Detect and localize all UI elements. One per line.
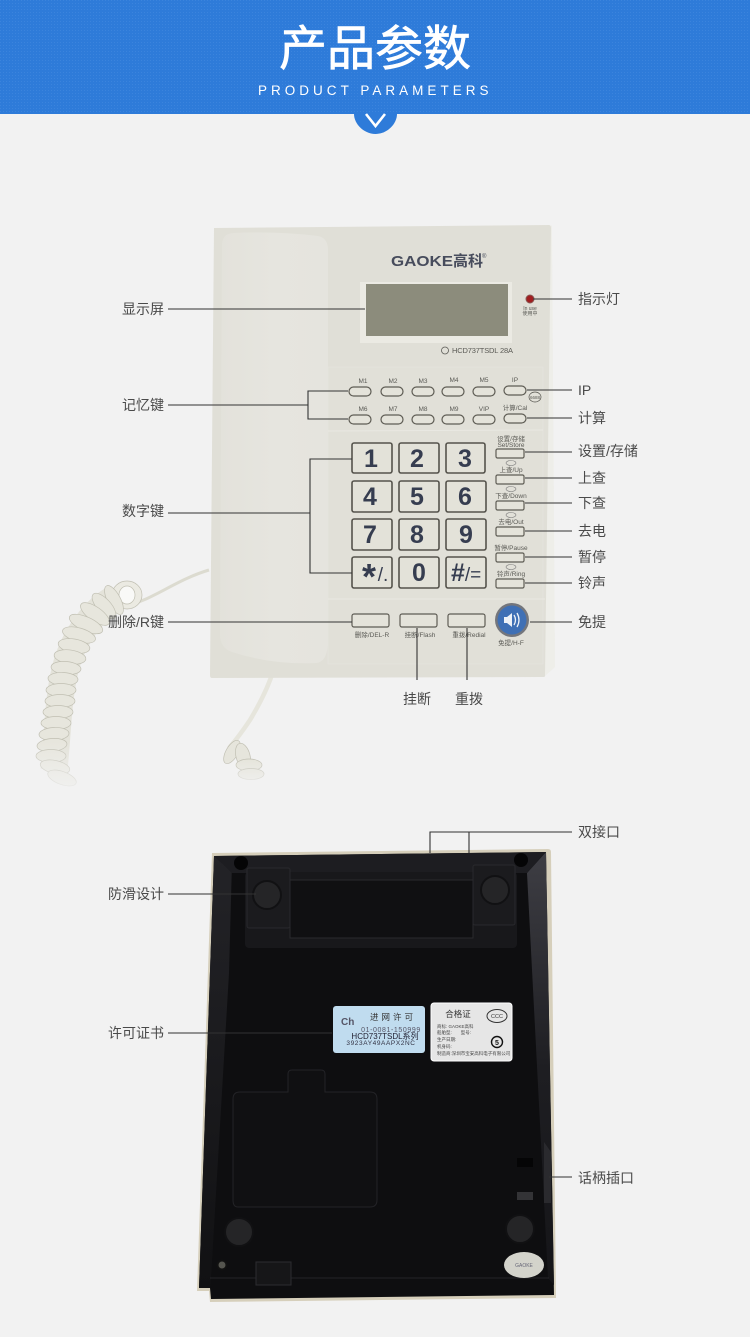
certificate sticker: 机身码:	[437, 1043, 452, 1050]
number keypad: 4	[363, 483, 377, 511]
labels: right	[578, 291, 638, 1186]
seal sticker: GAOKE	[515, 1263, 534, 1269]
labels: right: 双接口	[578, 824, 620, 840]
function keys: Set/Store	[497, 442, 525, 449]
labels: right: 暂停	[578, 549, 606, 565]
labels: bottom: 挂断	[403, 691, 431, 707]
memory keys: M4	[449, 377, 459, 384]
memory keys: M9	[449, 406, 459, 413]
function keys: 下查/Down	[495, 491, 527, 500]
network license sticker: Ch	[341, 1017, 354, 1028]
labels: right: 下查	[578, 495, 606, 511]
brand logo: 高科	[453, 252, 483, 270]
labels: left: 数字键	[122, 503, 164, 519]
labels: right: 免提	[578, 614, 606, 630]
speaker button: 免提/H-F	[498, 638, 524, 647]
bottom keys: 挂断/Flash	[405, 630, 436, 639]
right bevel	[527, 852, 554, 1285]
labels: left: 显示屏	[122, 301, 164, 317]
memory keys: M1	[358, 378, 368, 385]
number keypad	[352, 443, 486, 597]
keypad panel	[328, 367, 543, 664]
number keypad: /.	[378, 565, 388, 586]
certificate sticker: 商标: GAOKE高科	[437, 1023, 474, 1030]
top band	[214, 852, 546, 873]
number keypad: 3	[458, 445, 472, 473]
labels: right: 话柄插口	[578, 1170, 634, 1186]
labels: right: 设置/存储	[578, 443, 638, 459]
labels: left: 许可证书	[108, 1025, 164, 1041]
display screen	[360, 282, 512, 343]
indicator light: In use	[523, 306, 537, 312]
model number: HCD737TSDL 28A	[452, 346, 513, 355]
handset jack	[517, 1142, 551, 1203]
brand logo	[391, 252, 487, 270]
memory keys: VIP	[479, 406, 489, 413]
screw	[218, 1260, 226, 1270]
number keypad: #	[451, 559, 465, 587]
brand logo: ®	[482, 253, 487, 260]
number keypad: 6	[458, 483, 472, 511]
leader lines	[168, 299, 572, 1177]
certificate sticker	[431, 1003, 512, 1061]
memory keys: M6	[358, 406, 368, 413]
network license sticker	[333, 1006, 425, 1053]
memory keys: 6688	[530, 395, 541, 400]
number keypad: 2	[410, 445, 424, 473]
certificate sticker: 合格证	[445, 1009, 471, 1019]
bottom keys: 删除/DEL-R	[355, 630, 389, 639]
memory keys: M2	[388, 378, 398, 385]
labels: left: 防滑设计	[108, 886, 164, 902]
number keypad: 5	[410, 483, 424, 511]
black base	[199, 852, 554, 1299]
number keypad: *	[362, 556, 376, 597]
number keypad: 1	[364, 445, 378, 473]
memory keys: IP	[512, 377, 518, 384]
network license sticker: 01-0081-150999	[361, 1027, 421, 1034]
memory keys: M8	[418, 406, 428, 413]
number keypad: 9	[459, 521, 473, 549]
icon: model handset mark	[442, 347, 448, 354]
memory keys	[349, 377, 541, 424]
labels: right: IP	[578, 382, 591, 398]
network license sticker: HCD737TSDL系列	[351, 1031, 419, 1041]
phone side strip	[540, 225, 555, 676]
network license sticker: 3923AY49AAPX2NC	[346, 1040, 416, 1047]
subtitle: PRODUCT PARAMETERS	[258, 83, 492, 98]
labels: left: 删除/R键	[108, 614, 164, 630]
number keypad: 0	[412, 559, 426, 587]
second cord	[215, 660, 276, 790]
certificate sticker: 生产日期:	[437, 1036, 456, 1043]
indicator light: 使用中	[522, 310, 538, 317]
phone body	[210, 225, 551, 678]
function keys: 设置/存储	[497, 434, 525, 443]
battery cover	[233, 1070, 377, 1207]
memory keys: 计算/Cal	[503, 403, 528, 412]
handset	[220, 232, 328, 663]
memory keys: M7	[388, 406, 398, 413]
number keypad: 7	[363, 521, 377, 549]
function keys: 去电/Out	[498, 517, 524, 526]
bottom clip	[256, 1262, 291, 1285]
indicator light	[522, 295, 538, 317]
certificate sticker: CCC	[491, 1014, 503, 1020]
labels: left	[108, 301, 164, 1041]
function keys: 暂停/Pause	[494, 543, 528, 552]
icon: chevron badge	[354, 114, 397, 134]
beige shell edge	[197, 849, 556, 1302]
brand logo: GAOKE	[391, 253, 453, 270]
memory keys: M5	[479, 377, 489, 384]
seal sticker	[504, 1252, 544, 1278]
screw holes	[234, 853, 528, 870]
rubber feet	[225, 876, 534, 1246]
labels: bottom	[403, 691, 483, 707]
bottom lip line	[210, 1277, 549, 1279]
speaker button	[495, 603, 529, 647]
bottom keys: 重拨/Redial	[452, 630, 486, 639]
bottom keys	[352, 614, 486, 639]
function keys: 铃声/Ring	[497, 569, 525, 578]
coiled handset cord	[25, 570, 209, 797]
title: 产品参数	[279, 23, 471, 76]
labels: right: 指示灯	[578, 291, 620, 307]
labels: right: 计算	[578, 410, 606, 426]
number keypad: /=	[465, 565, 481, 586]
labels: bottom: 重拨	[455, 691, 483, 707]
labels: right: 上查	[578, 470, 606, 486]
labels: right: 去电	[578, 523, 606, 539]
telephone back view	[197, 849, 556, 1302]
function keys: 上查/Up	[499, 465, 523, 474]
memory keys: M3	[418, 378, 428, 385]
certificate sticker: 制造商:深圳市宝安高科电子有限公司	[437, 1050, 510, 1057]
function keys	[494, 434, 528, 588]
number keypad: 8	[410, 521, 424, 549]
left bevel	[199, 856, 232, 1288]
network license sticker: 进网许可	[370, 1012, 416, 1022]
labels: left: 记忆键	[122, 397, 164, 413]
telephone front view	[210, 225, 555, 678]
certificate sticker: 船舶型: 型号:	[437, 1029, 471, 1036]
certificate sticker: 5	[495, 1040, 499, 1047]
stand recess	[245, 865, 517, 948]
header banner	[0, 0, 750, 114]
labels: right: 铃声	[578, 575, 606, 591]
